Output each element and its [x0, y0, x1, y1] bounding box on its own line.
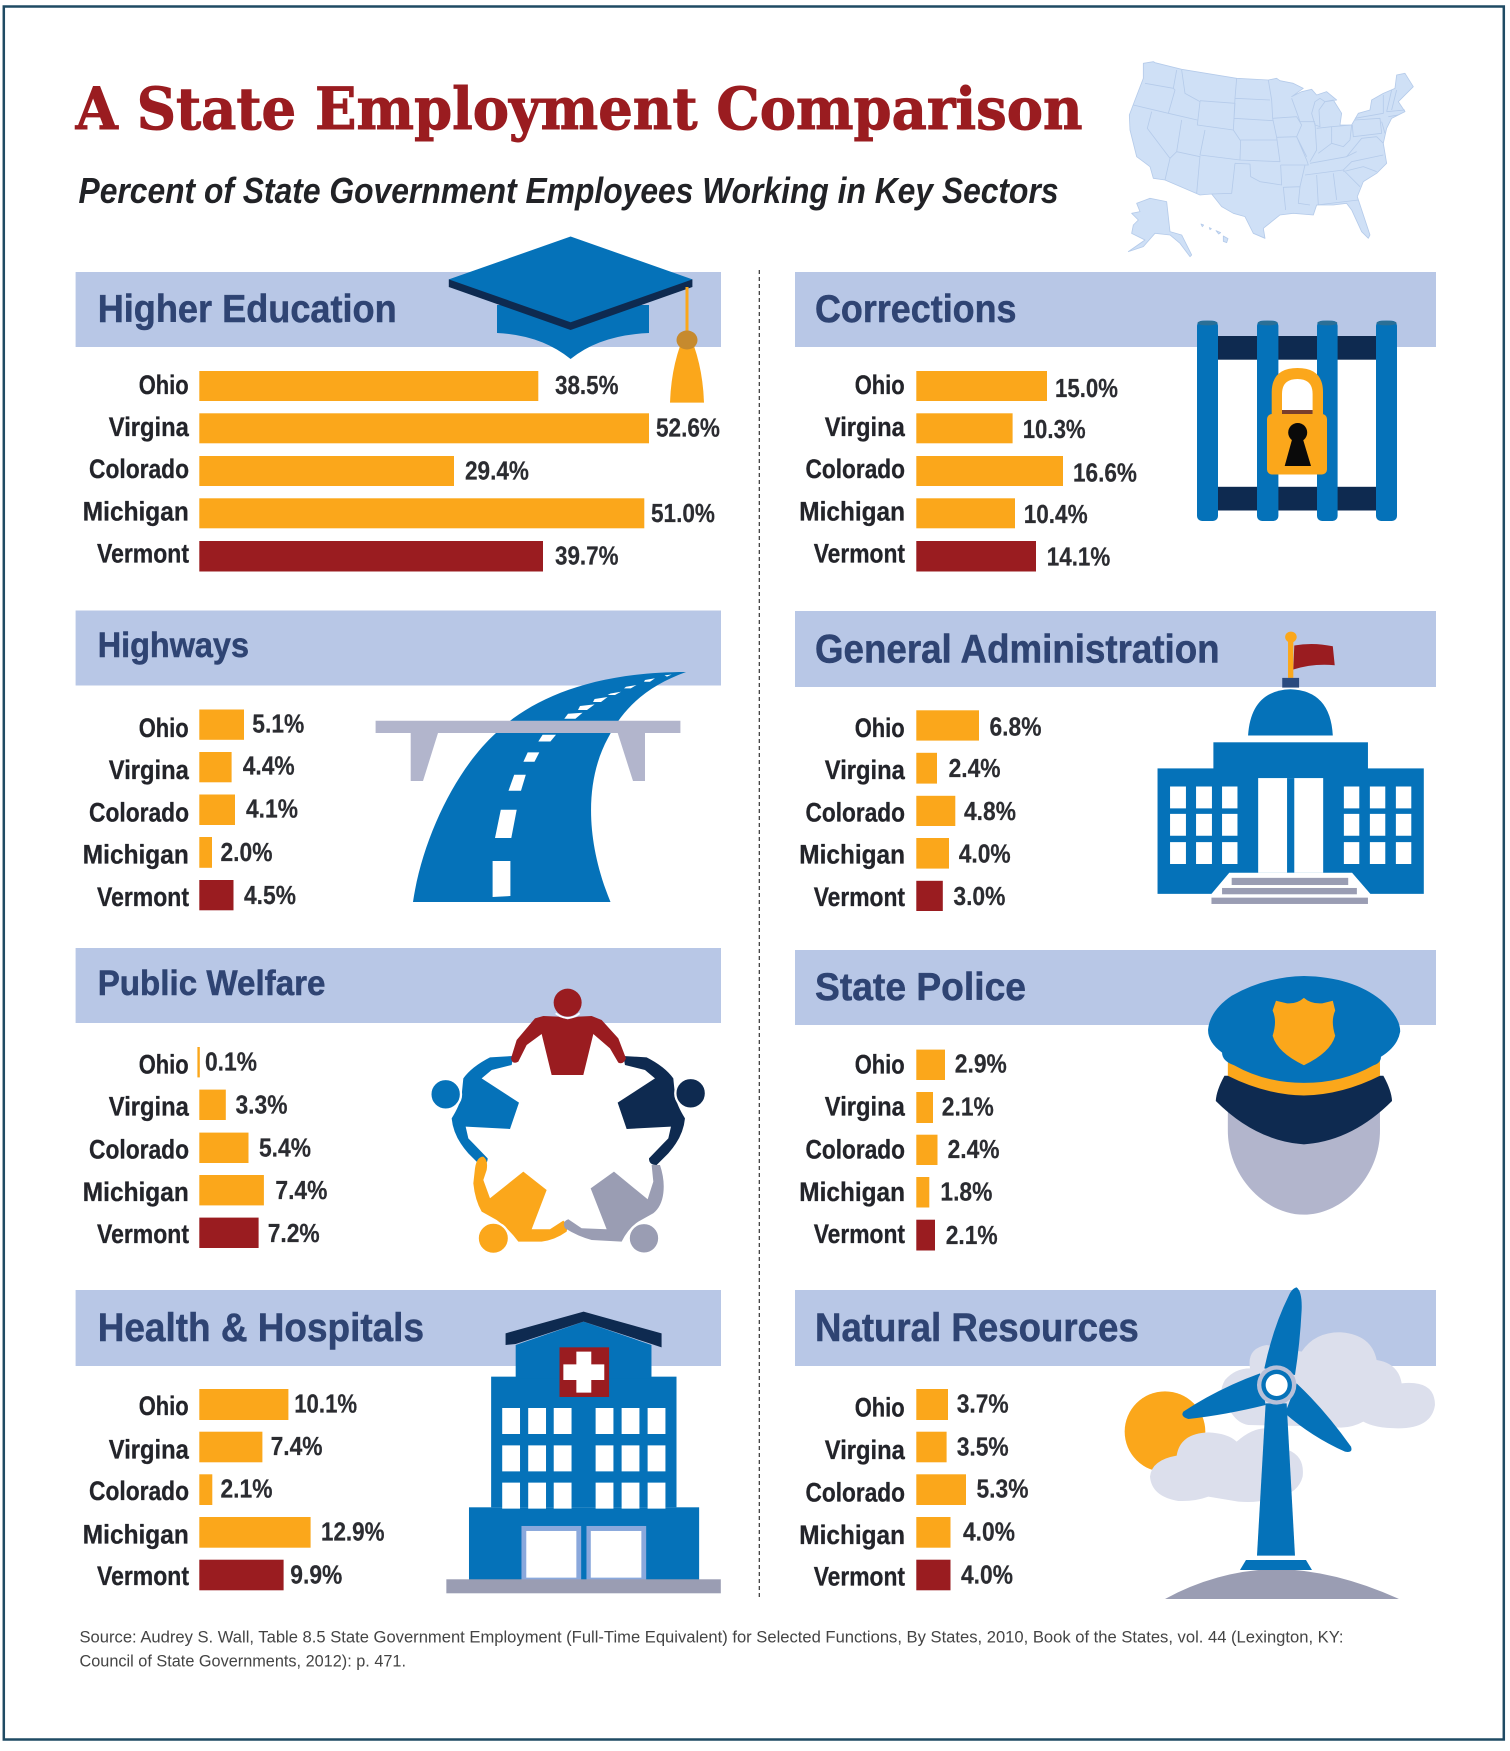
heading: Health & Hospitals: Health & Hospitals [98, 1306, 424, 1350]
heading: Natural Resources: Natural Resources [815, 1306, 1139, 1350]
row: Colorado 29.4%: Colorado [89, 454, 189, 484]
icon: graduation cap [449, 236, 704, 403]
icon: highway and overpass [376, 672, 686, 902]
row: Vermont 4.0%: 4.0% [961, 1559, 1013, 1589]
row: Virgina 3.3%: Virgina [109, 1092, 190, 1122]
row: Virgina 2.4%: Virgina [825, 755, 906, 785]
heading: Highways: Highways [98, 626, 249, 665]
row: Ohio 15.0%: Ohio [855, 370, 905, 400]
row: Vermont 7.2%: Vermont [97, 1219, 189, 1249]
heading: State Police: State Police [815, 966, 1026, 1009]
row: Virgina 3.5%: 3.5% [957, 1431, 1009, 1461]
panel: Health & Hospitals [76, 1290, 721, 1593]
heading: Higher Education: Higher Education [98, 288, 397, 331]
row: Virgina 3.3%: 3.3% [236, 1090, 288, 1120]
row: Ohio 6.8% [855, 710, 1042, 743]
row: Michigan 4.0%: Michigan [799, 1520, 905, 1550]
panel: Highways [76, 610, 721, 912]
row: Ohio 3.7%: Ohio [855, 1393, 905, 1423]
row: Vermont 4.0%: Vermont [814, 1562, 905, 1592]
row: Vermont 2.1%: Vermont [814, 1219, 905, 1249]
icon: police cap [1208, 976, 1400, 1215]
row: Ohio 3.7%: 3.7% [957, 1389, 1009, 1419]
row: Colorado 2.1%: Colorado [89, 1476, 189, 1506]
row: Michigan 4.0%: 4.0% [963, 1517, 1015, 1547]
panel: Public Welfare [76, 948, 721, 1254]
row: Ohio 3.7% [855, 1389, 1009, 1423]
icon: capitol building [1158, 632, 1424, 906]
row: Michigan 2.0% [83, 837, 272, 870]
row: Colorado 4.1% [89, 794, 298, 827]
row: Vermont 9.9% [97, 1559, 342, 1591]
row: Virgina 52.6%: Virgina [109, 412, 190, 442]
row: Ohio 5.1%: Ohio [139, 713, 189, 743]
row: Vermont 2.1%: 2.1% [946, 1220, 998, 1250]
row: Michigan 10.4%: 10.4% [1024, 499, 1088, 529]
title: A State Employment Comparison [75, 75, 1083, 143]
row: Virgina 7.4%: 7.4% [271, 1431, 323, 1461]
row: Ohio 5.1%: 5.1% [252, 709, 304, 739]
row: Virgina 3.3% [109, 1090, 288, 1122]
row: Vermont 3.0%: 3.0% [953, 881, 1005, 911]
row: Virgina 10.3%: 10.3% [1023, 414, 1086, 444]
row: Michigan 12.9%: 12.9% [321, 1517, 384, 1547]
row: Michigan 51.0%: Michigan [83, 496, 189, 526]
row: Colorado 29.4% [89, 454, 529, 486]
row: Michigan 1.8%: Michigan [799, 1177, 905, 1207]
row: Colorado 2.4%: 2.4% [948, 1134, 1000, 1164]
row: Virgina 2.1%: 2.1% [942, 1091, 994, 1121]
heading: Public Welfare: Public Welfare [98, 964, 326, 1003]
row: Vermont 39.7%: Vermont [97, 539, 189, 569]
row: Virgina 2.4% [825, 753, 1001, 785]
row: Michigan 2.0%: Michigan [83, 840, 189, 870]
row: Virgina 10.3% [825, 412, 1086, 444]
row: Ohio 0.1%: 0.1% [205, 1047, 257, 1077]
row: Colorado 16.6%: Colorado [806, 454, 905, 484]
row: Michigan 12.9% [83, 1517, 385, 1549]
row: Vermont 14.1% [814, 539, 1110, 572]
row: Ohio 10.1% [139, 1389, 357, 1421]
row: Michigan 4.0%: 4.0% [959, 838, 1011, 868]
row: Vermont 4.5%: Vermont [97, 882, 189, 912]
row: Ohio 38.5% [139, 370, 618, 401]
source note: Source: Audrey S. Wall, Table 8.5 State Government Employment (Full-Time Equivalent) for Selected Functions, By States, 2010, Book of the States, vol. 44 (Lexington, KY: [80, 1628, 1344, 1647]
row: Vermont 3.0%: Vermont [814, 882, 905, 912]
row: Vermont 39.7%: 39.7% [555, 540, 618, 570]
row: Colorado 29.4%: 29.4% [465, 456, 529, 486]
row: Ohio 5.1% [139, 709, 304, 743]
row: Virgina 4.4% [109, 751, 295, 785]
row: Ohio 38.5%: 38.5% [555, 370, 618, 400]
row: Vermont 3.0% [814, 881, 1005, 912]
row: Virgina 2.1%: Virgina [825, 1092, 906, 1122]
icon: US map [1128, 62, 1413, 257]
row: Ohio 0.1%: Ohio [139, 1050, 189, 1080]
row: Vermont 14.1%: 14.1% [1047, 542, 1110, 572]
row: Michigan 12.9%: Michigan [83, 1519, 189, 1549]
row: Virgina 2.4%: 2.4% [949, 753, 1001, 783]
row: Ohio 10.1%: Ohio [139, 1391, 189, 1421]
row: Virgina 7.4%: Virgina [109, 1434, 190, 1464]
row: Virgina 3.5%: Virgina [825, 1435, 906, 1465]
row: Ohio 0.1% [139, 1047, 257, 1080]
row: Virgina 3.5% [825, 1431, 1009, 1465]
row: Ohio 38.5%: Ohio [139, 370, 189, 400]
icon: prison bars and padlock [1197, 321, 1397, 521]
row: Colorado 4.8% [806, 796, 1016, 827]
row: Michigan 4.0% [799, 1517, 1015, 1550]
row: Vermont 39.7% [97, 539, 618, 572]
row: Michigan 51.0%: 51.0% [651, 498, 715, 528]
row: Colorado 5.3%: 5.3% [976, 1474, 1028, 1504]
row: Ohio 10.1%: 10.1% [294, 1389, 357, 1419]
row: Virgina 4.4%: 4.4% [243, 751, 295, 781]
row: Colorado 2.1%: 2.1% [220, 1474, 272, 1504]
row: Vermont 9.9%: 9.9% [290, 1559, 342, 1589]
row: Colorado 4.8%: Colorado [806, 797, 905, 827]
row: Virgina 52.6%: 52.6% [656, 413, 720, 443]
row: Michigan 7.4% [83, 1175, 327, 1207]
row: Ohio 2.9% [855, 1048, 1007, 1080]
panel: General Administration [795, 611, 1436, 912]
row: Colorado 5.4%: Colorado [89, 1135, 189, 1165]
row: Michigan 1.8% [799, 1176, 992, 1208]
panel: Corrections [795, 272, 1436, 572]
row: Virgina 52.6% [109, 412, 720, 443]
row: Vermont 4.5%: 4.5% [244, 880, 296, 910]
source note [80, 1628, 1344, 1671]
row: Colorado 4.1%: 4.1% [246, 794, 298, 824]
row: Ohio 2.9%: Ohio [855, 1050, 905, 1080]
row: Michigan 10.4%: Michigan [799, 496, 905, 526]
row: Vermont 14.1%: Vermont [814, 539, 905, 569]
row: Colorado 5.4% [89, 1133, 311, 1165]
icon: circle of people [430, 989, 706, 1254]
subtitle: Percent of State Government Employees Working in Key Sectors [78, 170, 1058, 211]
row: Michigan 2.0%: 2.0% [220, 837, 272, 867]
row: Colorado 16.6% [806, 454, 1137, 487]
row: Ohio 6.8%: Ohio [855, 713, 905, 743]
row: Colorado 16.6%: 16.6% [1073, 457, 1137, 487]
icon: wind turbine with sun and clouds [1125, 1287, 1435, 1599]
row: Ohio 6.8%: 6.8% [990, 712, 1042, 742]
row: Virgina 4.4%: Virgina [109, 755, 190, 785]
row: Virgina 7.4% [109, 1431, 323, 1464]
row: Michigan 51.0% [83, 496, 715, 528]
panel: Higher Education [76, 236, 721, 572]
row: Virgina 2.1% [825, 1091, 994, 1123]
row: Ohio 15.0%: 15.0% [1055, 373, 1118, 403]
row: Colorado 5.4%: 5.4% [259, 1133, 311, 1163]
panel: State Police [795, 950, 1436, 1250]
row: Michigan 4.0% [799, 838, 1011, 870]
row: Michigan 7.4%: 7.4% [275, 1175, 327, 1205]
row: Colorado 2.1% [89, 1474, 272, 1506]
icon: hospital [446, 1312, 721, 1593]
row: Colorado 5.3% [806, 1474, 1028, 1508]
row: Vermont 4.5% [97, 880, 296, 912]
row: Ohio 2.9%: 2.9% [955, 1048, 1007, 1078]
row: Michigan 4.0%: Michigan [799, 840, 905, 870]
row: Vermont 2.1% [814, 1219, 998, 1250]
heading: General Administration: General Administration [815, 627, 1220, 671]
row: Colorado 5.3%: Colorado [806, 1478, 905, 1508]
source note: Council of State Governments, 2012): p. 471. [80, 1652, 406, 1671]
panel: Natural Resources [795, 1287, 1436, 1599]
row: Vermont 7.2% [97, 1218, 320, 1249]
row: Michigan 1.8%: 1.8% [940, 1176, 992, 1206]
heading: Corrections: Corrections [815, 288, 1016, 331]
row: Vermont 7.2%: 7.2% [268, 1218, 320, 1248]
row: Colorado 4.1%: Colorado [89, 797, 189, 827]
row: Colorado 4.8%: 4.8% [964, 796, 1016, 826]
row: Ohio 15.0% [855, 370, 1118, 403]
row: Colorado 2.4%: Colorado [806, 1135, 905, 1165]
row: Colorado 2.4% [806, 1134, 1000, 1165]
row: Michigan 7.4%: Michigan [83, 1177, 189, 1207]
row: Vermont 4.0% [814, 1559, 1013, 1592]
row: Vermont 9.9%: Vermont [97, 1561, 189, 1591]
row: Michigan 10.4% [799, 496, 1088, 529]
row: Virgina 10.3%: Virgina [825, 412, 906, 442]
center divider [758, 270, 760, 1600]
